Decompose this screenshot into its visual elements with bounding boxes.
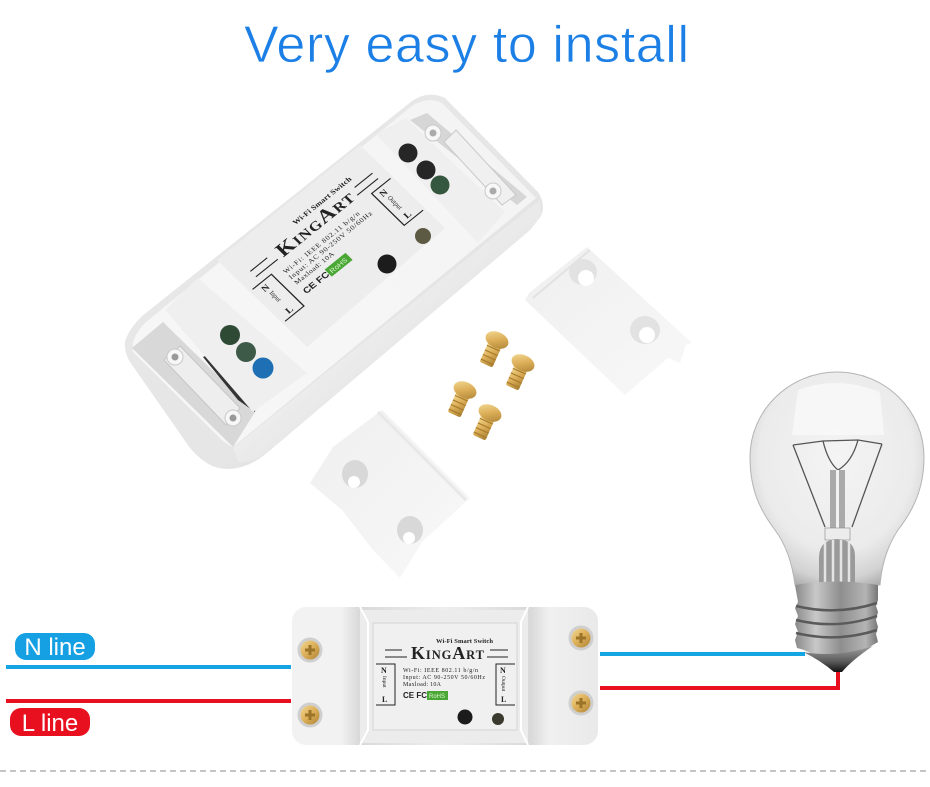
stem base — [819, 539, 855, 583]
title: Very easy to install — [244, 16, 689, 74]
neutral wire in — [6, 665, 291, 669]
tilted label text: N — [259, 283, 272, 294]
front label text: RoHS — [429, 694, 445, 700]
glass highlight — [792, 383, 884, 435]
front label text: Input — [381, 676, 387, 688]
tilted label text: Output — [386, 195, 404, 211]
tilted LED — [415, 228, 431, 244]
tilted label text: CE FC — [301, 270, 332, 296]
tilted label text: Maxload: 10A — [293, 250, 337, 286]
front label text: Output — [500, 676, 506, 692]
tilted label text: Wi-Fi: IEEE 802.11 b/g/n — [282, 210, 362, 275]
screw base — [795, 582, 878, 672]
right mounting bosses — [425, 125, 501, 199]
dashed divider — [0, 770, 930, 772]
L line tag: L line — [22, 710, 78, 737]
front label text: Maxload: 10A — [403, 682, 442, 688]
tilted label text: Wi-Fi Smart Switch — [291, 175, 354, 226]
right terminals — [398, 144, 450, 194]
left dark cavity — [203, 352, 256, 412]
front label text: Input: AC 90-250V 50/60Hz — [403, 675, 485, 681]
live wire in — [6, 699, 291, 703]
right terminal rail — [444, 130, 516, 205]
tilted label text: L — [283, 305, 296, 316]
light bulb — [750, 372, 924, 672]
left terminal rail — [164, 346, 240, 425]
left end recess — [132, 322, 255, 447]
device body — [125, 95, 543, 469]
tilted label panel — [217, 145, 445, 347]
tilted label text: N — [377, 187, 391, 199]
front label text: KINGART — [411, 643, 485, 663]
tilted label text: Input — [267, 290, 282, 304]
front body — [292, 607, 598, 745]
tilted label text: RoHS — [328, 257, 350, 275]
front label text: CE FC — [403, 691, 427, 700]
front label text: L — [382, 695, 387, 704]
front LED — [492, 713, 504, 725]
glass globe — [750, 372, 924, 585]
glass stem — [830, 470, 845, 528]
tilted smart switch — [125, 95, 543, 469]
front label text: L — [501, 695, 506, 704]
front center section — [360, 610, 528, 743]
front label text — [376, 638, 515, 705]
screw threads — [796, 603, 877, 637]
tilted label text — [231, 158, 423, 321]
front label text: Wi-Fi Smart Switch — [436, 638, 493, 645]
brass screws — [443, 328, 537, 443]
base tip — [803, 646, 873, 672]
tilted label text: Input: AC 90-250V 50/60Hz — [287, 210, 374, 281]
upper loose clip — [525, 247, 692, 395]
left mounting bosses — [167, 349, 241, 426]
tilted label text: KINGART — [271, 187, 359, 261]
front black button — [458, 710, 472, 724]
left terminal panel — [165, 278, 307, 412]
N line tag: N line — [24, 634, 86, 661]
front view smart switch — [292, 607, 598, 745]
right terminal panel — [376, 118, 505, 243]
neutral wire out — [600, 652, 805, 656]
lower loose clip — [310, 410, 470, 578]
device lower face — [233, 200, 541, 462]
front label text: N — [381, 666, 387, 675]
left terminals — [220, 325, 274, 378]
device top face — [133, 100, 536, 447]
right recess — [410, 113, 527, 205]
live wire out — [600, 672, 838, 688]
front label text: N — [500, 666, 506, 675]
filament wires — [793, 440, 882, 527]
tilted label text: L — [402, 210, 414, 221]
stem mount — [825, 528, 850, 540]
tilted black button — [378, 254, 396, 274]
front label text: Wi-Fi: IEEE 802.11 b/g/n — [403, 668, 478, 674]
front brass screws — [299, 627, 592, 726]
wires — [6, 652, 838, 703]
L line tag — [10, 708, 90, 737]
front label panel — [373, 623, 517, 730]
